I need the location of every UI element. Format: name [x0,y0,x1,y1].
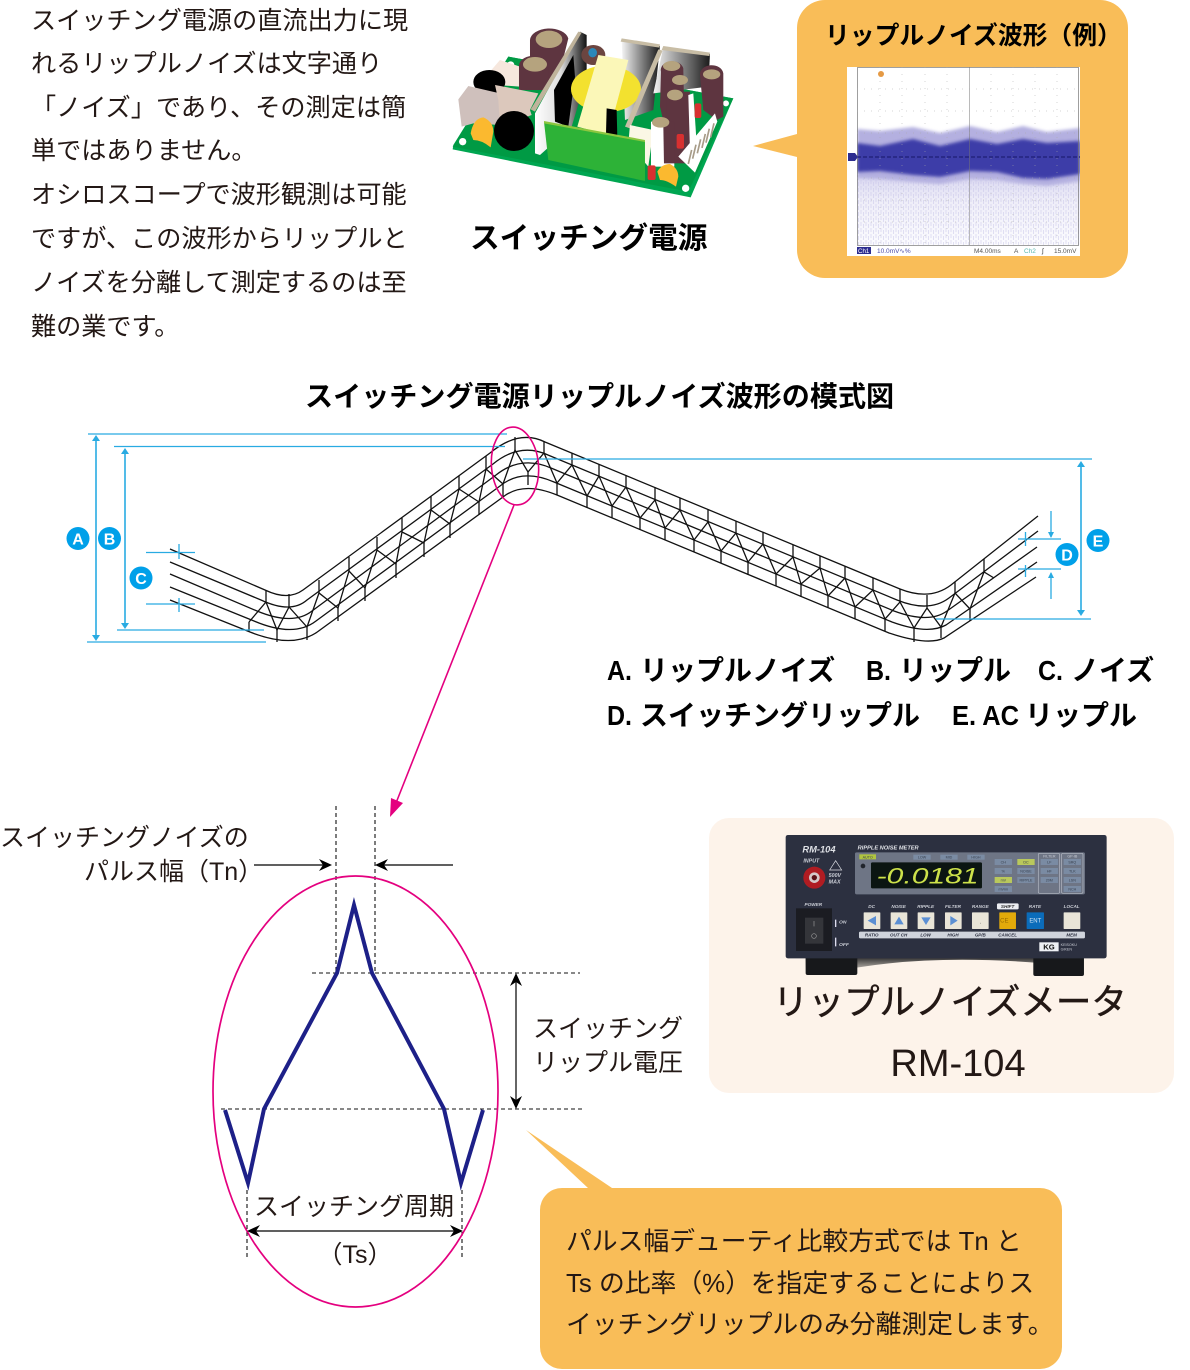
device: RM-104 meter: INPUT [803,859,820,865]
legend: B. [866,655,891,686]
device: RM-104 meter [786,835,1107,976]
device: RM-104 meter: MAX [829,879,841,885]
device: RM-104 meter: RATE [1029,904,1042,909]
oscilloscope waveform: 15.0mV [1054,248,1077,255]
label: pulse width: スイッチングノイズの [0,824,249,852]
chart: enlarged single switching pulse [213,806,585,1307]
label: switching period [254,1193,454,1269]
device: RM-104 meter: RANGE [972,904,990,909]
device: RM-104 meter: NCH [1068,887,1077,891]
product name: リップルノイズメータ [773,982,1127,1022]
dimension lines [87,434,1092,642]
device: RM-104 meter: GP-IB [1067,855,1078,859]
intro text block: オシロスコープで波形観測は可能 [31,181,407,209]
callout background with pointer [753,0,1128,278]
callout: pulse width duty comparison: Ts の比率（%）を指定することによりス [566,1269,1034,1298]
badge E: E [1093,534,1104,550]
device: RM-104 meter: MEM [1066,933,1077,938]
device: RM-104 meter: LOW [918,856,927,860]
intro text block: ノイズを分離して測定するのは至 [31,269,407,297]
device: RM-104 meter: CANCEL [998,933,1017,938]
device: RM-104 meter: KEISOKU [1061,943,1077,947]
device: RM-104 meter: HF [1047,869,1053,873]
dimension arrows [247,859,522,1237]
callout: pulse width duty comparison [526,1130,1062,1369]
legend: スイッチングリップル [640,699,920,731]
heading: schematic title: スイッチング電源リップルノイズ波形の模式図 [305,380,894,412]
device: RM-104 meter: LOCAL [1064,904,1080,909]
legend: リップルノイズ [640,654,835,686]
device: RM-104 meter: RIPPLE NOISE METER [858,846,920,852]
oscilloscope waveform: 10.0mV∿% [877,248,911,255]
panel: ripple noise waveform example callout [753,0,1128,278]
intro text block: スイッチング電源の直流出力に現 [31,7,408,35]
device: RM-104 meter: HIGH [971,856,981,860]
device: RM-104 meter: RATIO [865,933,879,938]
device: RM-104 meter: KG [1043,943,1055,952]
device: RM-104 meter: % [1002,869,1006,873]
device: RM-104 meter: ON [839,920,847,926]
device: RM-104 meter: LSN [1069,878,1076,882]
legend: ノイズ [1071,654,1154,686]
oscilloscope waveform: M4.00ms [974,248,1001,255]
badge C: C [135,571,147,588]
device: RM-104 meter: LF [1047,860,1052,864]
device: RM-104 meter: MID [946,856,953,860]
intro text block: 「ノイズ」であり、その測定は簡 [31,94,406,122]
intro text block: 単ではありません。 [31,137,257,165]
device: RM-104 meter: TLK [1069,869,1076,873]
device: RM-104 meter: AUTO [863,855,873,859]
label: switching ripple voltage [533,1015,683,1077]
device: RM-104 meter: NOISE [891,904,907,909]
device: RM-104 meter: SRQ [1068,860,1076,864]
dashed guides [221,806,585,1260]
label: switching period: スイッチング周期 [254,1193,454,1221]
oscilloscope waveform: Ch1 [858,248,870,255]
device: RM-104 meter: SHIFT [1001,904,1016,909]
device: RM-104 meter: mVrm [998,887,1008,891]
oscilloscope waveform: Ch2 [1024,248,1036,255]
chart: ripple noise waveform schematic [66,434,1110,642]
badge C [130,566,152,590]
device: RM-104 meter: GIKEN [1061,947,1072,951]
badge B [98,527,121,550]
device: RM-104 meter: GP/B [975,933,987,938]
panel heading: リップルノイズ波形（例） [825,21,1122,50]
legend [607,654,1154,731]
legend: リップル [1025,700,1137,731]
device: RM-104 meter: CH [1001,860,1006,864]
callout: pulse width duty comparison: パルス幅デューティ比較方式では Tn と [566,1227,1022,1256]
intro text block [31,7,408,341]
device: RM-104 meter: . [980,919,981,925]
badge B: B [104,532,115,548]
legend: A. [607,655,632,686]
legend: C. [1038,655,1063,686]
badge D: D [1061,548,1073,564]
illustration: switching power supply board [453,28,733,197]
device: RM-104 meter: RIPPLE [917,904,935,909]
badge E [1086,529,1110,552]
badge D [1056,543,1078,566]
label: switching ripple voltage: リップル電圧 [533,1049,683,1077]
device: RM-104 meter: 500V [829,873,842,879]
badge A: A [72,532,84,548]
device: RM-104 meter: FILTER [945,904,962,909]
label: pulse width [0,824,263,886]
intro text block: 難の業です。 [31,313,179,341]
device: RM-104 meter: CE [1000,918,1008,924]
device: RM-104 meter: LOW [920,933,932,938]
device: RM-104 meter: DC [868,904,876,909]
device: RM-104 meter: POWER [805,902,823,907]
device: RM-104 meter: NOISE [1020,869,1032,873]
pulse waveform [225,905,483,1183]
device: RM-104 meter: DC [1023,860,1029,864]
callout: pulse width duty comparison: イッチングリップルのみ分離測定します。 [566,1310,1054,1339]
device: RM-104 meter: RM-104 [802,845,836,855]
device: RM-104 meter: -0.0181 [877,864,979,889]
magnifier ellipse [213,876,498,1307]
device: RM-104 meter: ENT [1029,918,1042,924]
device: RM-104 meter: HIGH [947,933,959,938]
device: RM-104 meter: OUT CH [890,933,908,938]
panel: ripple noise meter product [709,818,1174,1093]
oscilloscope waveform: ∫ [1041,248,1044,255]
badge A [66,527,90,550]
legend: D. [607,700,632,731]
device: RM-104 meter: RIPPLE [1019,878,1033,882]
product model: RM-104 [890,1043,1026,1085]
intro text block: れるリップルノイズは文字通り [31,50,382,78]
oscilloscope waveform: A [1014,248,1019,255]
legend: E. AC [952,700,1019,731]
waveform band lines [170,437,1038,642]
legend: リップル [899,655,1011,686]
arrow: magnify link from peak to detail [390,425,542,817]
oscilloscope waveform [847,67,1080,256]
device: RM-104 meter: mV [1001,878,1007,882]
label: switching period: （Ts） [317,1241,393,1269]
label: switching ripple voltage: スイッチング [533,1015,683,1043]
heading: switching power supply: スイッチング電源 [470,222,708,255]
device: RM-104 meter: 20M [1046,878,1053,882]
intro text block: ですが、この波形からリップルと [31,225,408,253]
device: RM-104 meter: OFF [839,942,850,948]
label: pulse width: パルス幅（Tn） [84,858,263,886]
device: RM-104 meter: FILTER [1043,855,1056,859]
